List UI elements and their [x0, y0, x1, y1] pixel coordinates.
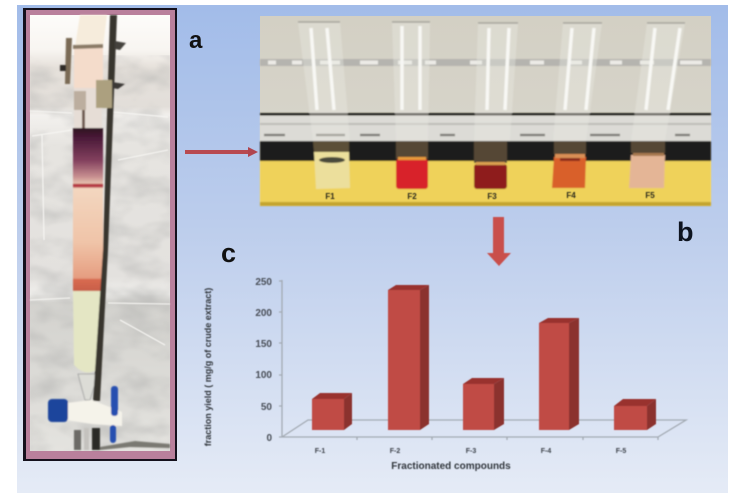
x axis category labels: F-2: [390, 448, 400, 455]
arrow: column to tubes: [185, 147, 258, 157]
label b: b: [677, 217, 694, 247]
x axis category labels: F-5: [616, 448, 626, 455]
column tube: [73, 15, 107, 400]
chart floor and axes: [279, 280, 686, 440]
tube F5: [629, 23, 685, 188]
tube F4: [552, 23, 602, 188]
y axis tick labels: 250: [255, 277, 272, 288]
x axis category labels: F-3: [466, 448, 476, 455]
tube labels: F5: [645, 191, 655, 200]
tube labels: F2: [407, 192, 417, 201]
bar F5: [614, 399, 656, 430]
tube F2: [392, 22, 430, 189]
y axis tick labels: 150: [255, 339, 272, 350]
y axis tick labels: [255, 277, 272, 444]
y axis tick labels: 200: [255, 308, 272, 319]
x axis category labels: [315, 448, 626, 455]
rack and glass base: [260, 113, 711, 116]
bar F1: [312, 393, 352, 430]
bar chart: [203, 277, 686, 472]
tube F1: [298, 22, 350, 189]
stopcock: [66, 400, 122, 426]
support rod: [93, 15, 117, 401]
tube labels: F4: [566, 191, 576, 200]
photo: chromatography column: [23, 8, 177, 461]
y axis tick labels: 0: [266, 433, 272, 444]
tube labels: F1: [325, 192, 335, 201]
tube F3: [474, 23, 518, 189]
clear strip of rack: [260, 59, 711, 66]
y axis title: fraction yield ( mg/g of crude extract): [203, 288, 213, 446]
photo: fraction tubes: [260, 16, 711, 206]
x axis title: Fractionated compounds: [391, 461, 511, 472]
bar F4: [539, 318, 579, 430]
y axis tick labels: 50: [261, 402, 272, 413]
bar F3: [463, 378, 504, 430]
tube labels: [325, 191, 655, 201]
clamps: [65, 38, 72, 84]
label a: a: [189, 27, 203, 54]
arrow: tubes to chart: [487, 217, 511, 266]
y axis tick labels: 100: [255, 370, 272, 381]
bar F2: [388, 285, 429, 430]
x axis category labels: F-4: [541, 448, 551, 455]
x axis category labels: F-1: [315, 448, 325, 455]
tube labels: F3: [487, 192, 497, 201]
label c: c: [221, 238, 236, 268]
